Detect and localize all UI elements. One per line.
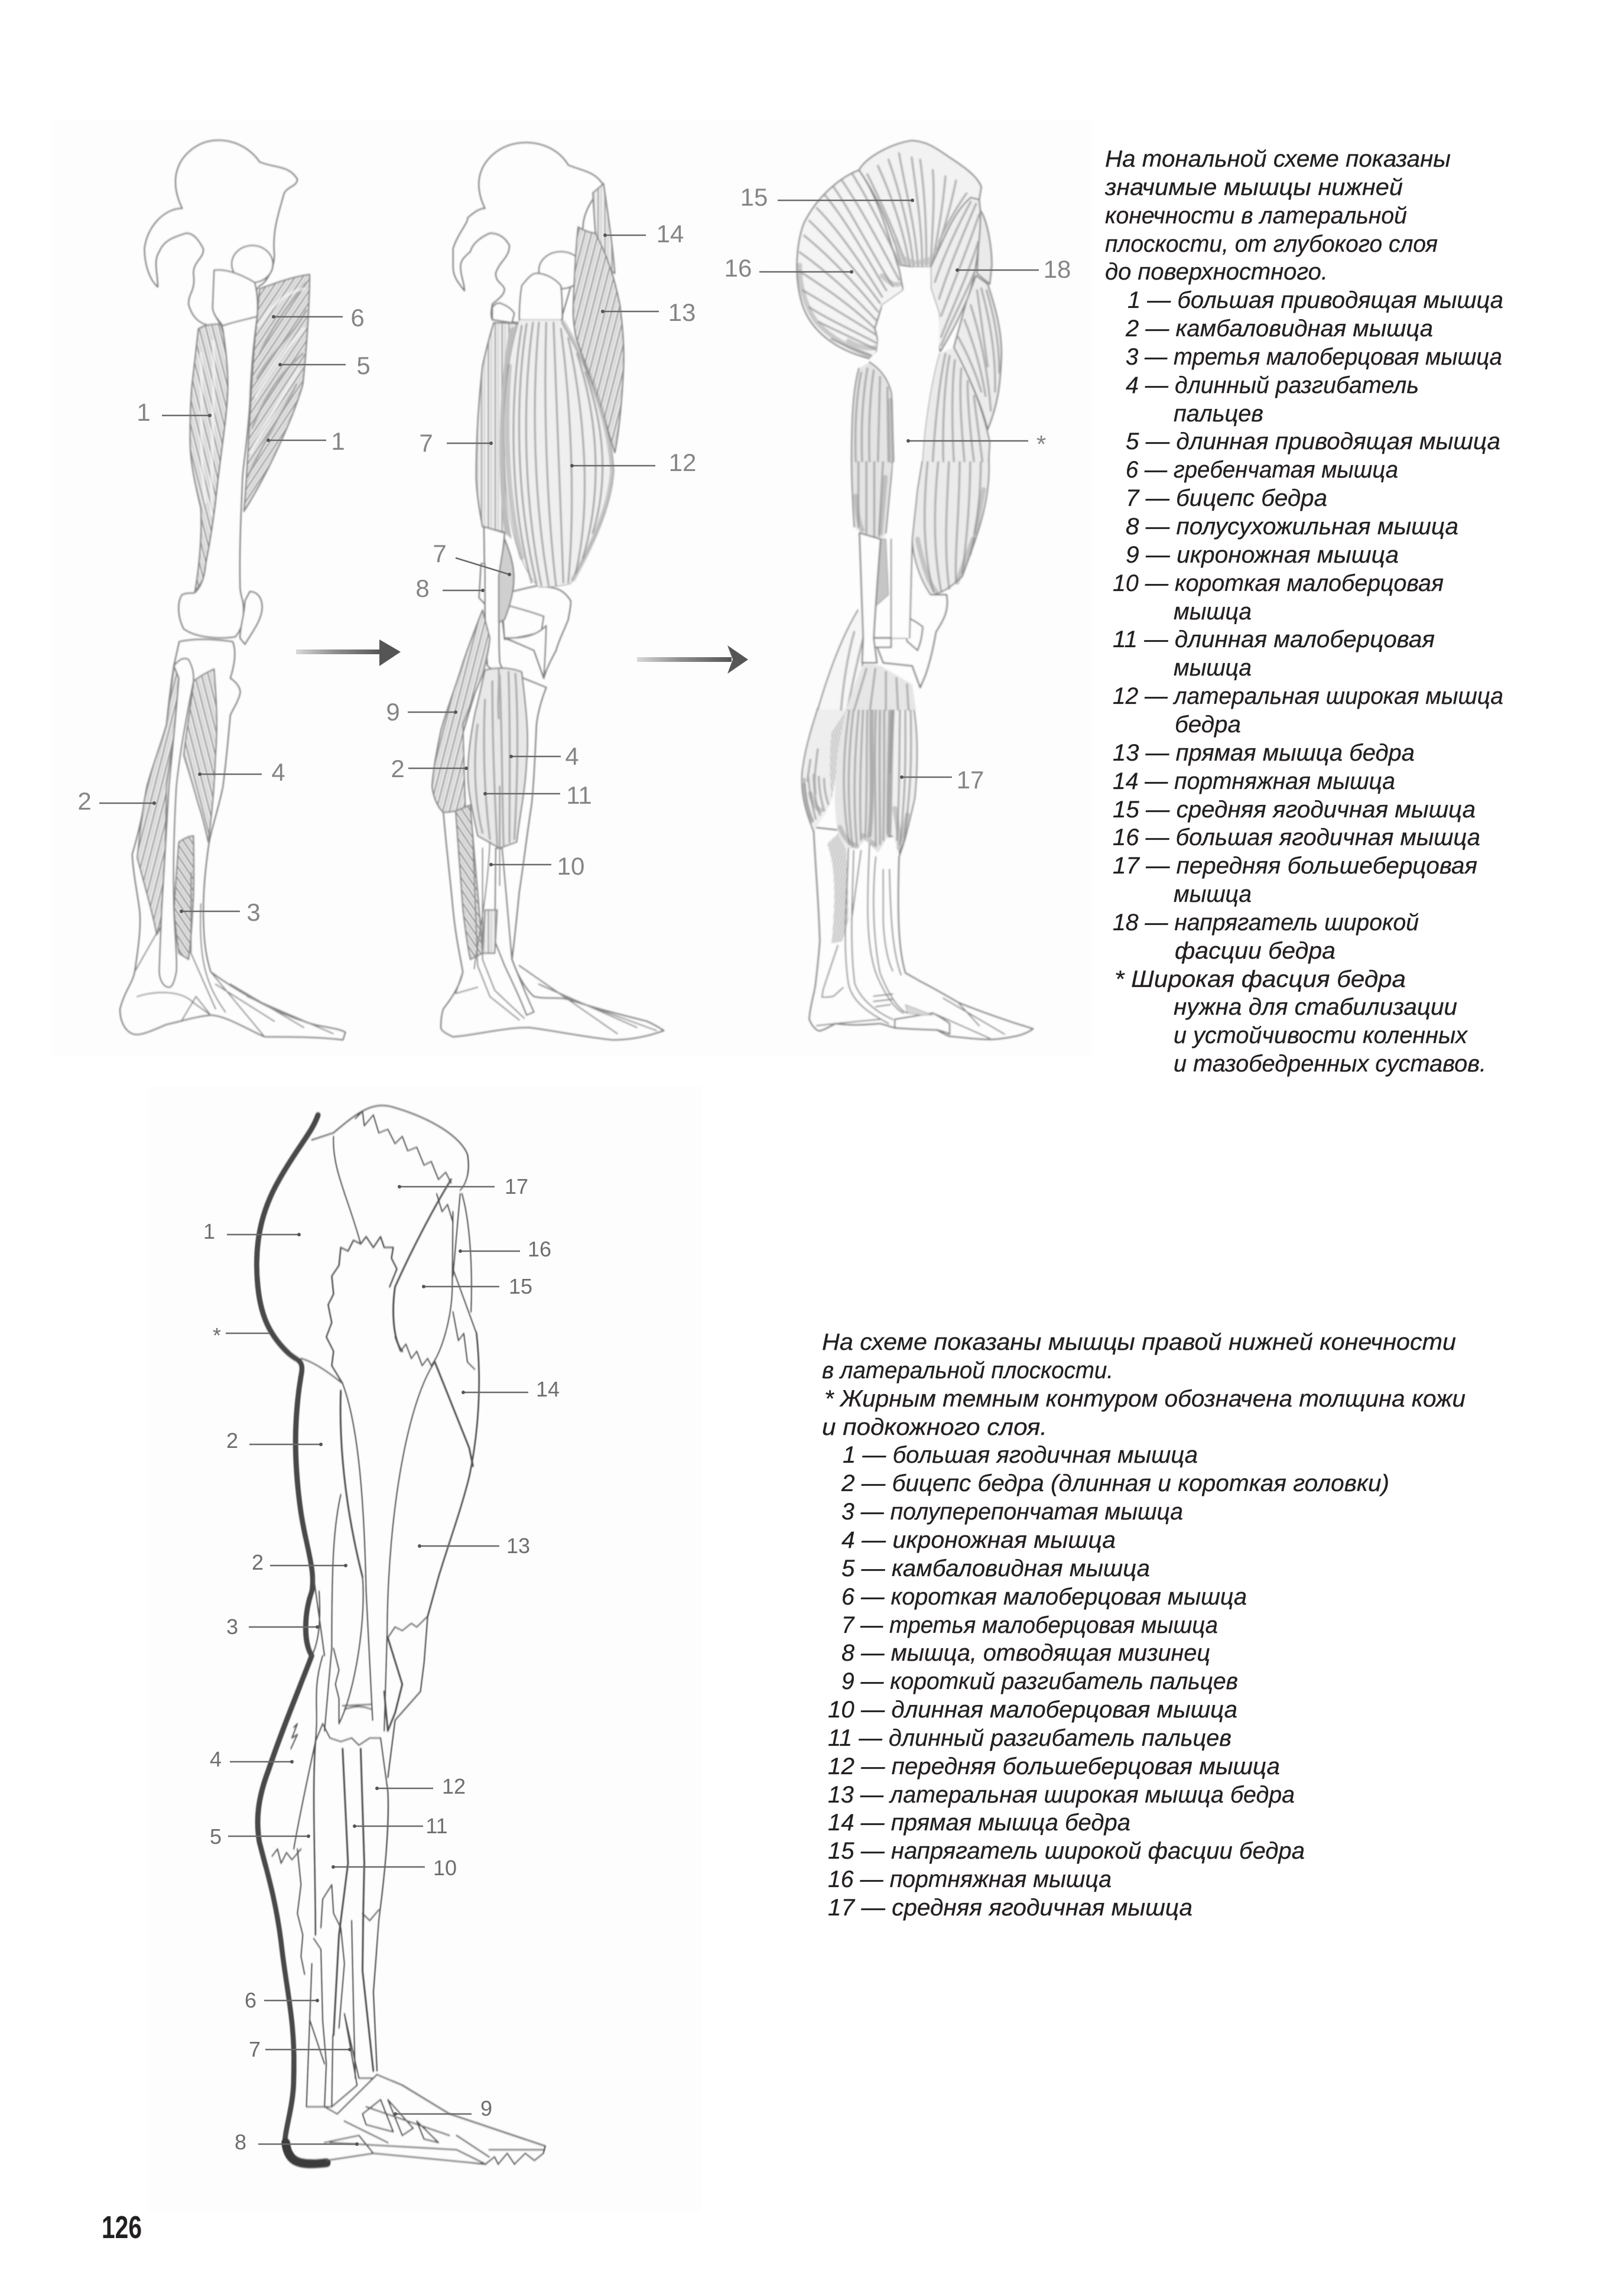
text block: line scheme legend: 12 — передняя большеберцовая мышца	[828, 1753, 1280, 1779]
labels: middle layer leg: 7	[433, 540, 447, 567]
labels: line scheme: 7	[249, 2037, 261, 2061]
labels: middle layer leg: 14	[657, 220, 684, 248]
text block: line scheme legend: 1 — большая ягодичная мышца	[843, 1442, 1198, 1468]
text block: tonal scheme legend: * Широкая фасция бедра	[1114, 966, 1406, 992]
labels: line scheme: 17	[505, 1174, 528, 1199]
text block: line scheme legend: 4 — икроножная мышца	[841, 1527, 1116, 1553]
text block: tonal scheme legend: 15 — средняя ягодичная мышца	[1113, 797, 1476, 823]
figure: middle layer leg	[432, 142, 664, 1040]
labels: deep layer leg: 4	[271, 758, 285, 786]
figure: line scheme of right leg	[257, 1106, 545, 2164]
text block: line scheme legend: 11 — длинный разгибатель пальцев	[828, 1725, 1231, 1751]
labels: deep layer leg: 1	[137, 398, 151, 426]
labels: middle layer leg: 8	[415, 574, 430, 602]
labels: line scheme	[203, 1174, 560, 2154]
text block: tonal scheme legend: 18 — напрягатель широкой	[1113, 910, 1419, 936]
labels: line scheme: 16	[528, 1237, 551, 1261]
text block: tonal scheme legend: и устойчивости коленных	[1174, 1022, 1468, 1048]
text block: tonal scheme legend: 2 — камбаловидная мышца	[1125, 316, 1433, 342]
text block: tonal scheme legend: 12 — латеральная широкая мышца	[1113, 683, 1503, 709]
labels: line scheme: 14	[536, 1377, 560, 1401]
labels: line scheme: 2	[252, 1550, 264, 1574]
labels: line scheme: 10	[433, 1856, 457, 1880]
text block: tonal scheme legend: 16 — большая ягодичная мышца	[1113, 824, 1480, 850]
page number: 126	[102, 2210, 142, 2245]
labels: superficial layer leg: 16	[724, 254, 752, 282]
text block: line scheme legend: * Жирным темным контуром обозначена толщина кожи	[824, 1386, 1465, 1412]
text block: tonal scheme legend: 9 — икроножная мышца	[1126, 542, 1399, 568]
text block: tonal scheme legend: бедра	[1175, 712, 1241, 738]
text block: tonal scheme legend: 11 — длинная малоберцовая	[1113, 626, 1435, 652]
text block: tonal scheme legend: 10 — короткая малоберцовая	[1113, 570, 1444, 596]
labels: middle layer leg: 12	[669, 449, 696, 476]
text block: line scheme legend: 16 — портняжная мышца	[828, 1866, 1112, 1892]
text block: tonal scheme legend: 13 — прямая мышца бедра	[1113, 740, 1415, 766]
text block: tonal scheme legend: 6 — гребенчатая мышца	[1126, 457, 1398, 483]
text block: tonal scheme legend: значимые мышцы нижней	[1104, 174, 1403, 200]
text block: tonal scheme legend: фасции бедра	[1175, 938, 1335, 964]
labels: middle layer leg: 2	[391, 755, 405, 782]
text block: line scheme legend: 6 — короткая малоберцовая мышца	[841, 1584, 1247, 1610]
text block: tonal scheme legend: и тазобедренных суставов.	[1174, 1051, 1486, 1077]
middle leg	[818, 457, 989, 710]
labels: superficial layer leg: 17	[957, 766, 984, 794]
text block: line scheme legend: 10 — длинная малоберцовая мышца	[828, 1697, 1237, 1723]
labels: deep layer leg: 6	[350, 304, 365, 332]
text block: tonal scheme legend: 4 — длинный разгибатель	[1126, 372, 1419, 398]
labels: line scheme: 1	[203, 1219, 215, 1243]
text block: tonal scheme legend: 8 — полусухожильная мышца	[1126, 514, 1458, 540]
labels: middle layer leg: 9	[386, 698, 400, 726]
text block: tonal scheme legend: до поверхностного.	[1105, 259, 1328, 285]
hip and thigh	[797, 141, 1002, 461]
labels: line scheme: 3	[226, 1615, 238, 1639]
labels: deep layer leg: 5	[356, 352, 371, 379]
text block: tonal scheme legend: 5 — длинная приводящая мышца	[1126, 428, 1500, 454]
labels: middle layer leg	[386, 220, 696, 880]
labels: line scheme: 12	[442, 1774, 466, 1798]
labels: line scheme: 15	[509, 1274, 532, 1298]
text block: line scheme legend: 8 — мышца, отводящая мизинец	[841, 1640, 1210, 1666]
skin contour	[257, 1115, 318, 2146]
lower leg	[802, 709, 1033, 1040]
labels: deep layer leg: 2	[77, 787, 92, 815]
labels: middle layer leg: 11	[566, 781, 592, 809]
labels: line scheme: 6	[245, 1988, 256, 2012]
labels: line scheme: 8	[235, 2130, 246, 2154]
labels: line scheme: 2	[226, 1428, 238, 1453]
labels: line scheme: *	[213, 1323, 221, 1347]
text block: line scheme legend: 15 — напрягатель широкой фасции бедра	[828, 1838, 1305, 1864]
labels: line scheme: 9	[480, 2096, 492, 2120]
text block: line scheme legend: 2 — бицепс бедра (длинная и короткая головки)	[841, 1470, 1389, 1496]
labels: middle layer leg: 4	[565, 742, 579, 770]
panel: scheme drawing background	[148, 1086, 701, 2211]
labels: middle layer leg: 7	[419, 429, 433, 457]
arrow: first to second figure	[296, 639, 401, 666]
labels: line scheme: 4	[210, 1747, 222, 1771]
text block: tonal scheme legend: нужна для стабилизации	[1174, 994, 1457, 1020]
text block: tonal scheme legend	[1104, 146, 1503, 1077]
text block: line scheme legend: 14 — прямая мышца бедра	[828, 1810, 1130, 1836]
text block: line scheme legend: 7 — третья малоберцовая мышца	[841, 1612, 1218, 1638]
labels: middle layer leg: 13	[668, 298, 696, 326]
text block: tonal scheme legend: 14 — портняжная мышца	[1113, 768, 1395, 794]
labels: superficial layer leg: 15	[740, 183, 768, 211]
text block: line scheme legend: 5 — камбаловидная мышца	[841, 1555, 1150, 1581]
figure: superficial layer leg	[797, 141, 1033, 1040]
text block: line scheme legend: На схеме показаны мышцы правой нижней конечности	[822, 1329, 1456, 1355]
text block: tonal scheme legend: плоскости, от глубокого слоя	[1105, 231, 1438, 257]
text block: tonal scheme legend: На тональной схеме показаны	[1105, 146, 1451, 172]
text block: line scheme legend: 3 — полуперепончатая мышца	[841, 1499, 1183, 1525]
text block: line scheme legend: в латеральной плоскости.	[822, 1358, 1113, 1384]
labels: line scheme: 5	[210, 1824, 222, 1849]
text block: tonal scheme legend: конечности в латеральной	[1105, 203, 1407, 229]
figure: deep layer leg	[120, 140, 345, 1040]
labels: superficial layer leg: *	[1036, 430, 1046, 458]
text block: tonal scheme legend: мышца	[1174, 599, 1252, 625]
text block: tonal scheme legend: пальцев	[1174, 401, 1263, 427]
text block: line scheme legend: 17 — средняя ягодичная мышца	[828, 1895, 1192, 1921]
text block: tonal scheme legend: 1 — большая приводящая мышца	[1127, 287, 1503, 313]
text block: line scheme legend: 9 — короткий разгибатель пальцев	[841, 1668, 1238, 1694]
text block: tonal scheme legend: 3 — третья малоберцовая мышца	[1126, 344, 1502, 370]
labels: deep layer leg	[77, 304, 371, 926]
labels: middle layer leg: 10	[557, 852, 584, 880]
text block: line scheme legend: 13 — латеральная широкая мышца бедра	[828, 1782, 1295, 1808]
text block: tonal scheme legend: 7 — бицепс бедра	[1126, 485, 1327, 511]
labels: line scheme: 11	[425, 1814, 448, 1838]
text block: tonal scheme legend: мышца	[1174, 655, 1252, 681]
text block: line scheme legend: и подкожного слоя.	[822, 1414, 1047, 1440]
text block: tonal scheme legend: 17 — передняя большеберцовая	[1113, 853, 1477, 879]
panel: tonal drawing background	[52, 121, 1092, 1056]
labels: deep layer leg: 1	[331, 427, 345, 455]
labels: line scheme: 13	[506, 1534, 530, 1558]
labels: superficial layer leg: 18	[1044, 255, 1071, 283]
text block: tonal scheme legend: мышца	[1174, 881, 1252, 907]
arrow: second to third figure	[637, 645, 748, 674]
labels: deep layer leg: 3	[246, 898, 261, 926]
labels: superficial layer leg	[724, 183, 1071, 794]
text block: line scheme legend	[822, 1329, 1465, 1921]
